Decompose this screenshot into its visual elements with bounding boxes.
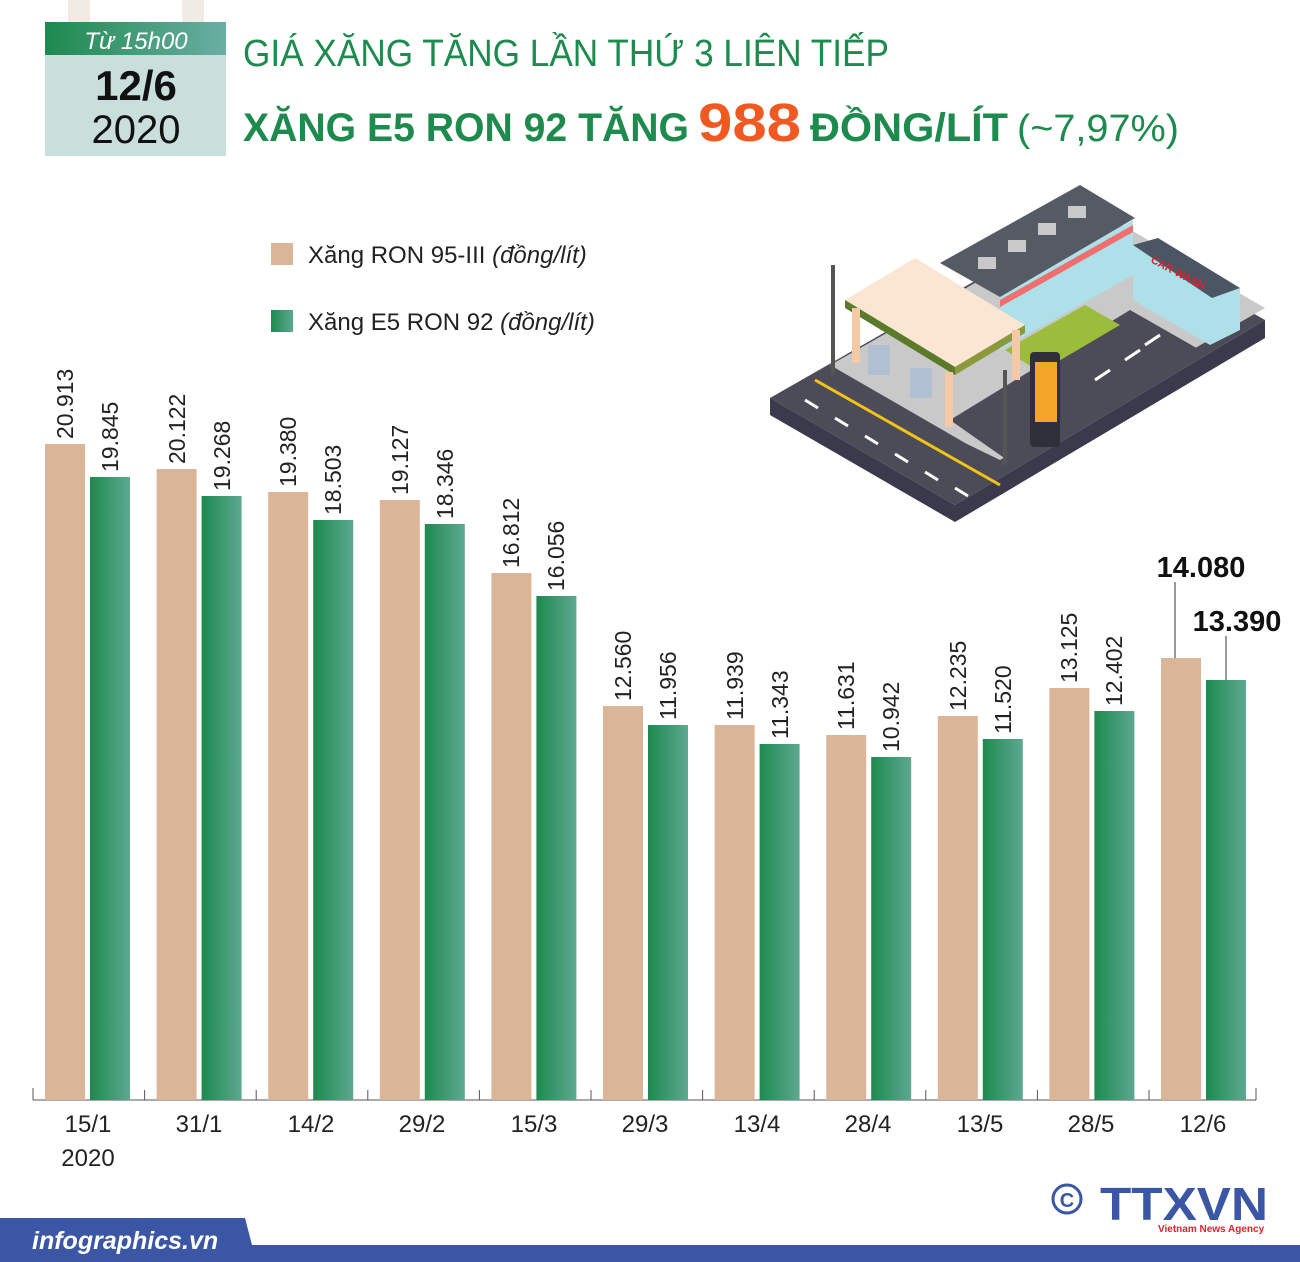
value labels: 18.346	[432, 449, 458, 519]
value labels: 19.845	[97, 402, 123, 472]
value labels: 11.939	[722, 651, 748, 720]
value labels: 19.380	[275, 417, 301, 487]
title	[243, 31, 1179, 153]
highlighted latest values: 14.080	[1157, 552, 1245, 584]
value labels: 11.343	[767, 670, 793, 739]
value labels: 12.402	[1101, 636, 1127, 706]
value labels: 20.122	[164, 394, 190, 464]
value labels: 19.268	[209, 421, 235, 491]
x-axis labels: 29/2	[399, 1111, 445, 1138]
bar chart	[33, 369, 1281, 1172]
x-axis labels	[61, 1111, 1226, 1172]
value labels: 16.056	[543, 521, 569, 591]
value labels: 11.956	[655, 651, 681, 720]
calendar date badge: Từ 15h00	[84, 28, 188, 55]
logo TTXVN: TTXVN	[1100, 1178, 1268, 1230]
legend: Xăng RON 95-III (đồng/lít)	[308, 242, 587, 269]
highlighted latest values	[1157, 552, 1281, 680]
x-axis labels: 13/4	[734, 1111, 780, 1138]
title: GIÁ XĂNG TĂNG LẦN THỨ 3 LIÊN TIẾP	[243, 31, 889, 75]
x-axis labels: 14/2	[288, 1111, 334, 1138]
value labels: 11.631	[833, 661, 859, 730]
value labels: 12.560	[610, 631, 636, 701]
calendar date badge: 12/6	[95, 62, 177, 109]
title: (~7,97%)	[1017, 108, 1179, 150]
value labels: 10.942	[878, 682, 904, 752]
value labels: 20.913	[52, 369, 78, 439]
calendar date badge: 2020	[92, 108, 180, 152]
value labels: 12.235	[945, 641, 971, 711]
x-axis labels: 15/1	[65, 1111, 111, 1138]
illustration: gas station: CAR WASH	[1149, 254, 1207, 293]
highlighted latest values: 13.390	[1193, 606, 1281, 638]
value labels: 16.812	[498, 498, 524, 568]
x-axis labels: 13/5	[957, 1111, 1003, 1138]
x-axis labels: 29/3	[622, 1111, 668, 1138]
value labels: 11.520	[990, 665, 1016, 734]
value labels: 13.125	[1056, 613, 1082, 683]
title: XĂNG E5 RON 92 TĂNG	[243, 105, 689, 150]
value labels: 19.127	[387, 425, 413, 495]
x-axis labels: 12/6	[1180, 1111, 1226, 1138]
value labels	[52, 369, 1127, 752]
title: 988	[698, 93, 801, 153]
x-axis labels: 15/3	[511, 1111, 557, 1138]
footer bar	[0, 1218, 1300, 1262]
legend	[271, 242, 595, 336]
logo TTXVN: C	[1060, 1190, 1074, 1212]
footer bar: infographics.vn	[32, 1227, 218, 1255]
bars	[45, 444, 1246, 1100]
logo TTXVN: Vietnam News Agency	[1158, 1224, 1265, 1235]
illustration: gas station	[770, 185, 1265, 522]
x-axis labels: 28/5	[1068, 1111, 1114, 1138]
calendar date badge	[45, 0, 226, 156]
legend: Xăng E5 RON 92 (đồng/lít)	[308, 309, 595, 336]
x-axis labels: 31/1	[176, 1111, 222, 1138]
title: ĐỒNG/LÍT	[810, 104, 1008, 150]
logo TTXVN	[1053, 1178, 1268, 1235]
x-axis labels: 28/4	[845, 1111, 891, 1138]
value labels: 18.503	[320, 445, 346, 515]
x-axis labels: 2020	[61, 1145, 115, 1172]
